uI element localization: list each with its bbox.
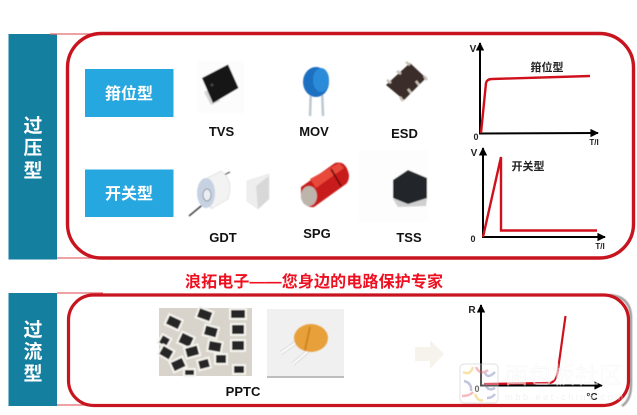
watermark: site logo and name: 面包板社区	[505, 362, 622, 388]
sidebar: over-voltage type	[8, 34, 57, 260]
icon: faint arrow	[415, 340, 444, 369]
text: TSS: TSS	[396, 230, 422, 245]
sidebar: over-current type: 流	[23, 341, 43, 363]
icon: ESD component	[386, 62, 427, 101]
text: ESD: ESD	[391, 126, 418, 141]
watermark: site logo and name	[460, 362, 623, 403]
text: MOV: MOV	[299, 124, 329, 139]
icon: TVS component	[198, 61, 244, 113]
chart: clamping V-T/I curve: 箝位型	[530, 60, 564, 74]
sidebar: over-voltage type: 型	[23, 160, 43, 182]
watermark: site logo and name: mbb.eet-china.com	[505, 392, 623, 403]
heading: red slogan: 浪拓电子——您身边的电路保护专家	[185, 272, 443, 291]
chart: switching V-T/I curve: T/I	[595, 242, 605, 251]
chart: R-temperature curve	[468, 305, 602, 403]
chart: switching V-T/I curve: 0	[470, 234, 476, 244]
chart: clamping V-T/I curve	[470, 43, 599, 147]
chart: switching V-T/I curve: 开关型	[512, 159, 544, 173]
sidebar: over-current type: 型	[23, 363, 43, 385]
sidebar: over-current type: 过	[23, 319, 43, 341]
sidebar: over-voltage type: 压	[23, 138, 43, 159]
chart: clamping V-T/I curve: V	[470, 44, 477, 55]
text: GDT: GDT	[209, 230, 237, 245]
text: SPG: SPG	[303, 226, 331, 241]
chart: R-temperature curve: R	[468, 305, 476, 316]
panel: over-current frame	[57, 293, 631, 406]
icon: MOV varistor	[303, 67, 329, 116]
photo: PPTC radial device	[267, 309, 344, 378]
chart: clamping V-T/I curve: T/I	[589, 138, 599, 147]
label: switching type: 开关型	[105, 184, 153, 203]
text: PPTC: PPTC	[226, 384, 261, 399]
label: switching type	[85, 170, 174, 217]
photo: PPTC surface-mount parts	[158, 307, 252, 376]
label: clamping type	[85, 69, 174, 117]
panel: over-voltage frame	[50, 34, 634, 258]
chart: R-temperature curve: °C	[586, 392, 598, 403]
icon: TSS component	[358, 150, 428, 222]
chart: switching V-T/I curve: V	[471, 148, 478, 159]
sidebar: over-voltage type: 过	[23, 115, 43, 137]
chart: R-temperature curve: 0	[474, 384, 480, 394]
chart: clamping V-T/I curve: 0	[473, 132, 479, 142]
chart: switching V-T/I curve	[470, 148, 605, 251]
sidebar: over-current type	[8, 293, 57, 406]
icon: GDT component	[189, 171, 269, 216]
label: clamping type: 箝位型	[105, 84, 153, 103]
text: TVS: TVS	[209, 124, 234, 139]
icon: SPG component	[301, 162, 349, 207]
